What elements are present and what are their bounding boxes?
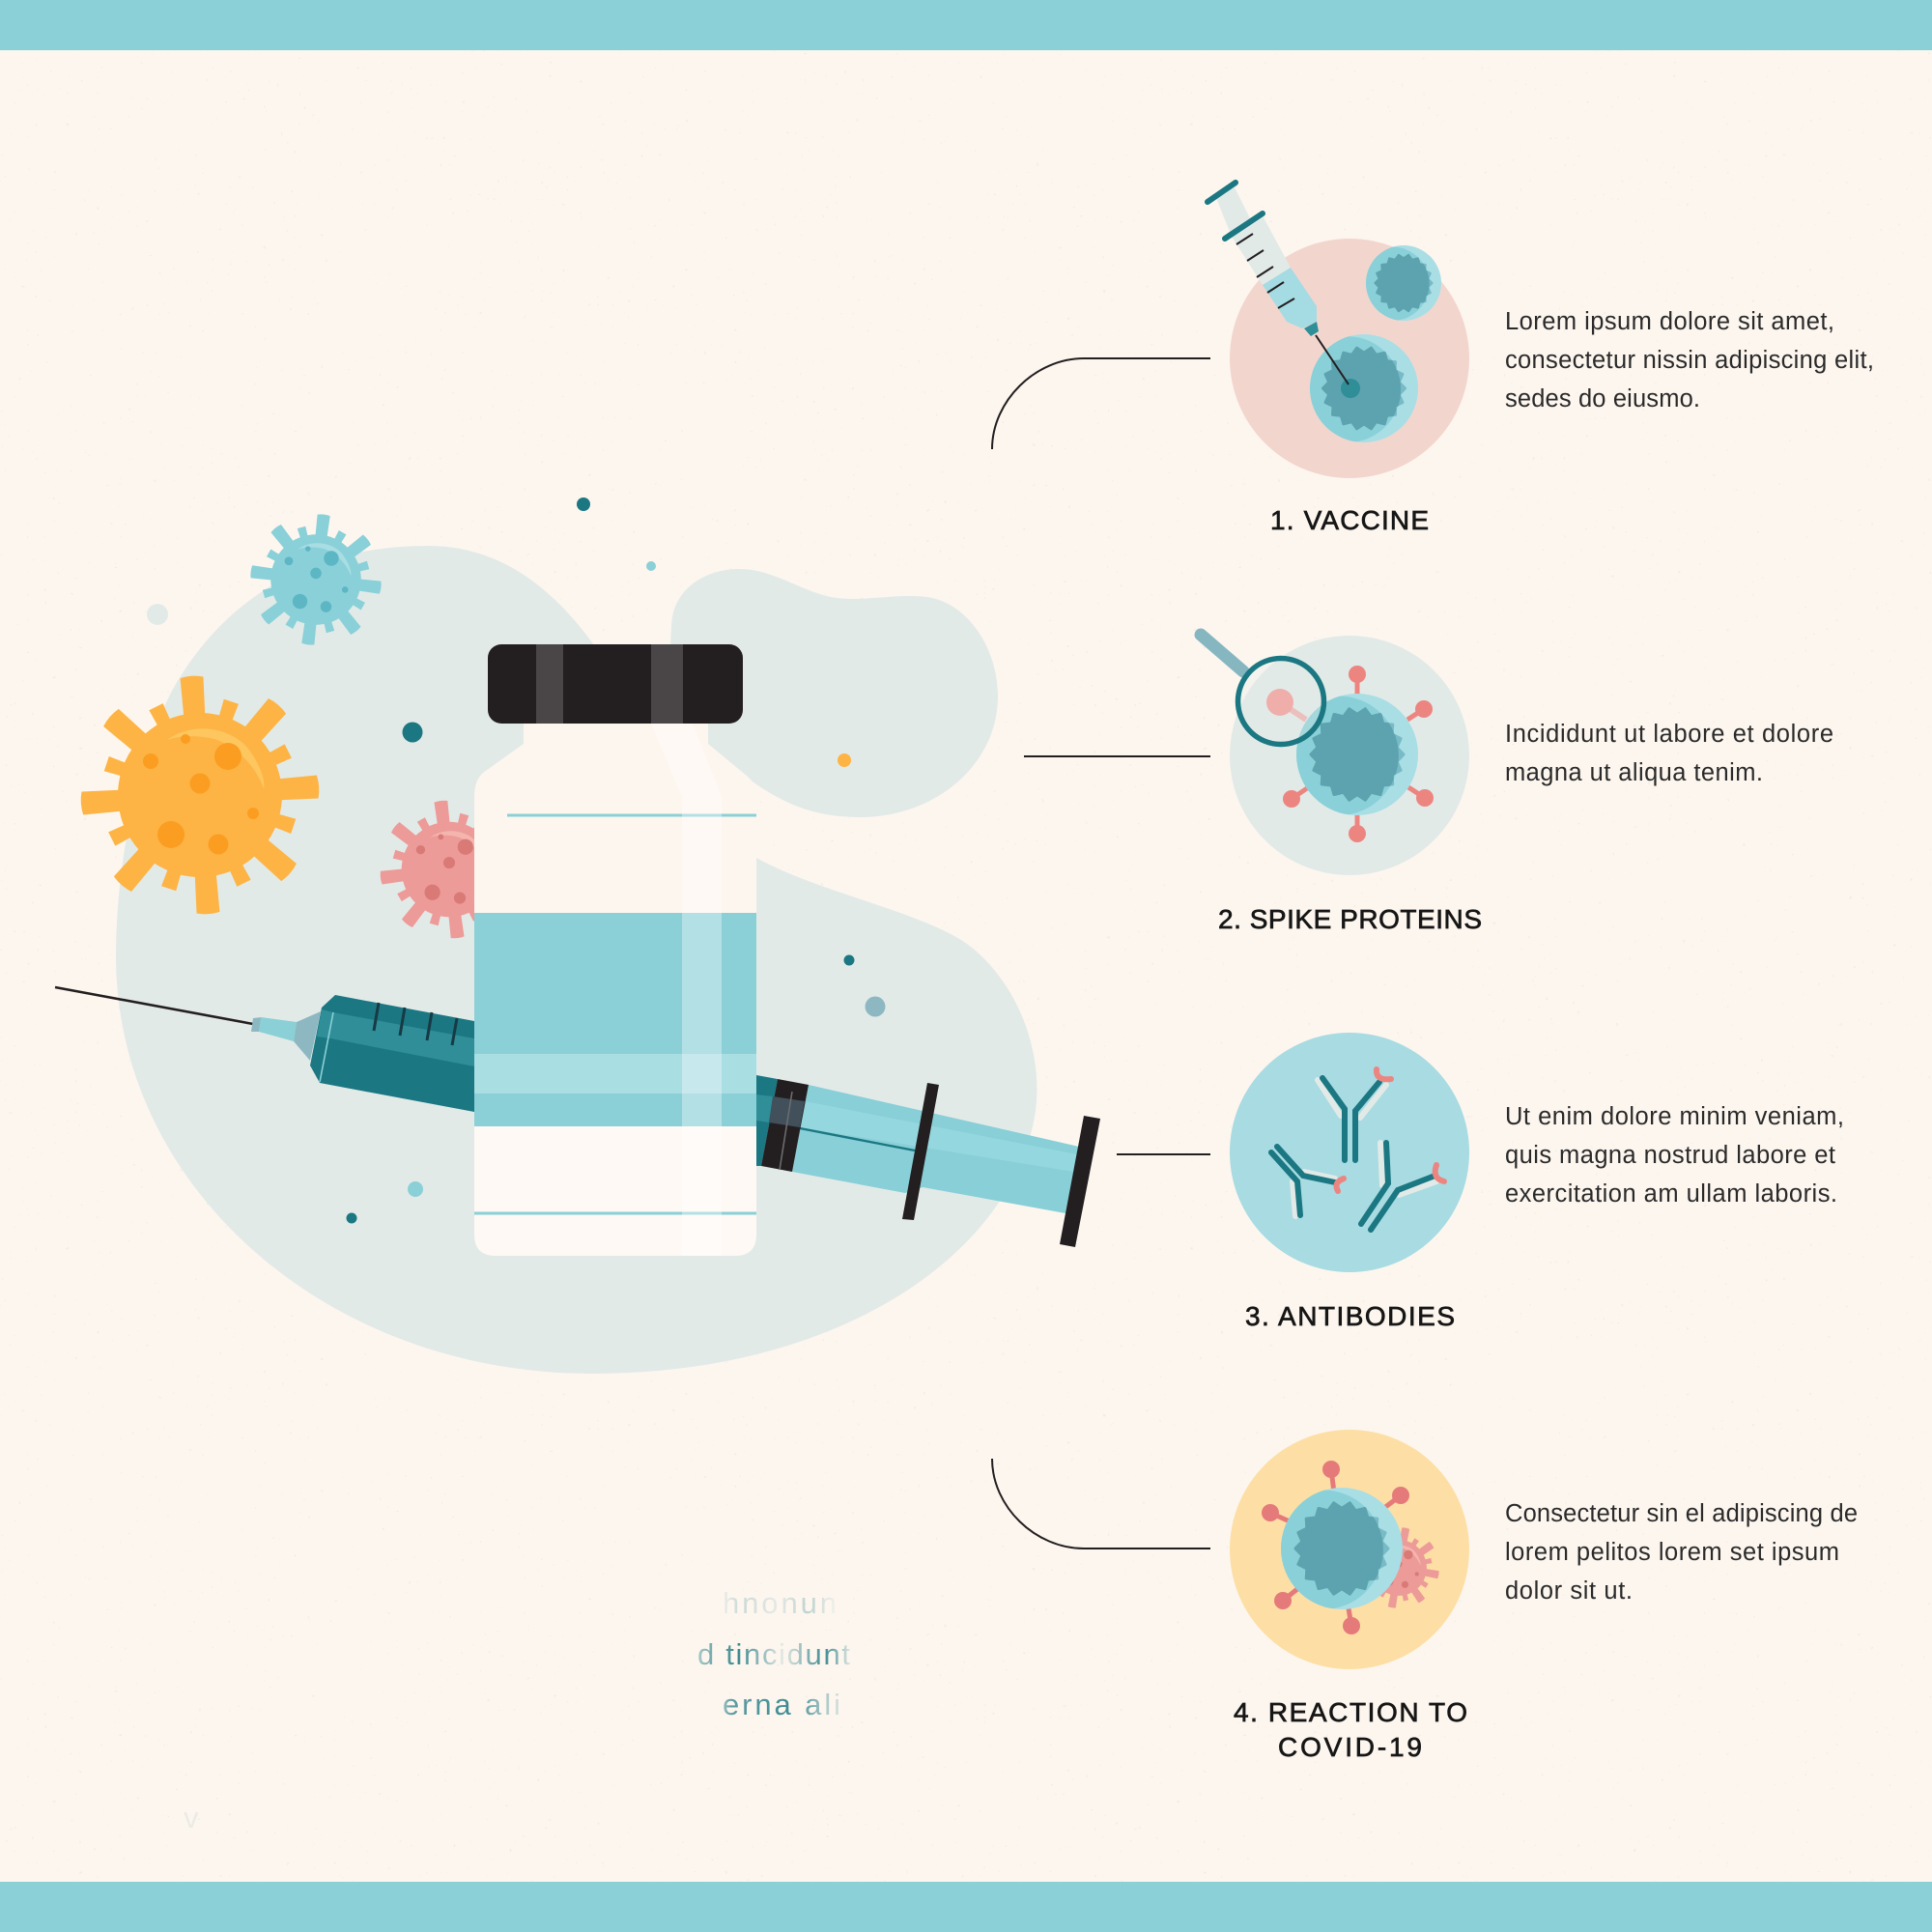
step 3 text: quis magna nostrud labore et — [1505, 1142, 1835, 1169]
vial label band — [474, 1054, 756, 1094]
main illustration: vaccine vial, syringe and viruses — [55, 497, 1100, 1374]
faded ghost text: erna ali — [723, 1688, 840, 1721]
step 4 icon: reaction to covid-19 — [1230, 1430, 1469, 1669]
connector 4 — [992, 1459, 1210, 1548]
faded ghost text: d tincidunt — [697, 1637, 850, 1671]
step 4 text: dolor sit ut. — [1505, 1577, 1633, 1605]
syringe: plunger end — [756, 1075, 1100, 1247]
vial lower glass — [474, 1126, 756, 1256]
step 4 text — [1505, 1500, 1858, 1605]
step 3 title: 3. ANTIBODIES — [1245, 1301, 1455, 1331]
cap stripe left — [536, 644, 563, 724]
cap stripe right — [651, 644, 683, 724]
step 4 text: Consectetur sin el adipiscing de — [1505, 1500, 1858, 1527]
vial — [474, 644, 756, 1256]
step 4 title: 4. REACTION TO — [1234, 1697, 1467, 1727]
connector 1 — [992, 358, 1210, 449]
large background blob — [116, 546, 1037, 1374]
step 3 text — [1505, 1103, 1844, 1208]
decorative dots — [147, 497, 885, 1223]
small background blob — [670, 569, 998, 817]
step 3 icon: antibodies — [1230, 1033, 1469, 1272]
vial cap — [488, 644, 743, 724]
step 2 text — [1505, 721, 1833, 786]
faded ghost text — [184, 1586, 850, 1834]
virus: orange — [72, 668, 327, 923]
step 4 title: COVID-19 — [1278, 1732, 1422, 1762]
faded ghost text: hnonun — [723, 1586, 837, 1620]
step 2 text: Incididunt ut labore et dolore — [1505, 721, 1833, 748]
virus: pink — [372, 792, 526, 947]
vial label — [474, 913, 756, 1126]
vial upper line — [507, 813, 756, 817]
step 4 title — [1234, 1697, 1467, 1762]
faded ghost text: v — [184, 1801, 199, 1834]
step 1 text: consectetur nissin adipiscing elit, — [1505, 347, 1874, 374]
bottom band — [0, 1882, 1932, 1932]
step 1 icon: vaccine — [1208, 183, 1469, 478]
step 2 icon: spike proteins — [1201, 635, 1469, 875]
vial highlight — [651, 724, 722, 1256]
vial lower line — [474, 1211, 756, 1215]
step 1 text: sedes do eiusmo. — [1505, 385, 1700, 412]
step 1 text — [1505, 308, 1874, 412]
syringe: needle end — [55, 987, 474, 1112]
virus: teal — [242, 506, 389, 653]
step 1 text: Lorem ipsum dolore sit amet, — [1505, 308, 1834, 335]
vial body — [474, 724, 756, 1256]
connector 3 — [1117, 1153, 1210, 1155]
top band — [0, 0, 1932, 50]
step 3 text: Ut enim dolore minim veniam, — [1505, 1103, 1844, 1130]
connector 2 — [1024, 755, 1210, 757]
step 1 title: 1. VACCINE — [1270, 505, 1429, 535]
step 4 text: lorem pelitos lorem set ipsum — [1505, 1539, 1839, 1566]
step 3 text: exercitation am ullam laboris. — [1505, 1180, 1837, 1208]
step 2 text: magna ut aliqua tenim. — [1505, 759, 1763, 786]
step 2 title: 2. SPIKE PROTEINS — [1218, 904, 1482, 934]
